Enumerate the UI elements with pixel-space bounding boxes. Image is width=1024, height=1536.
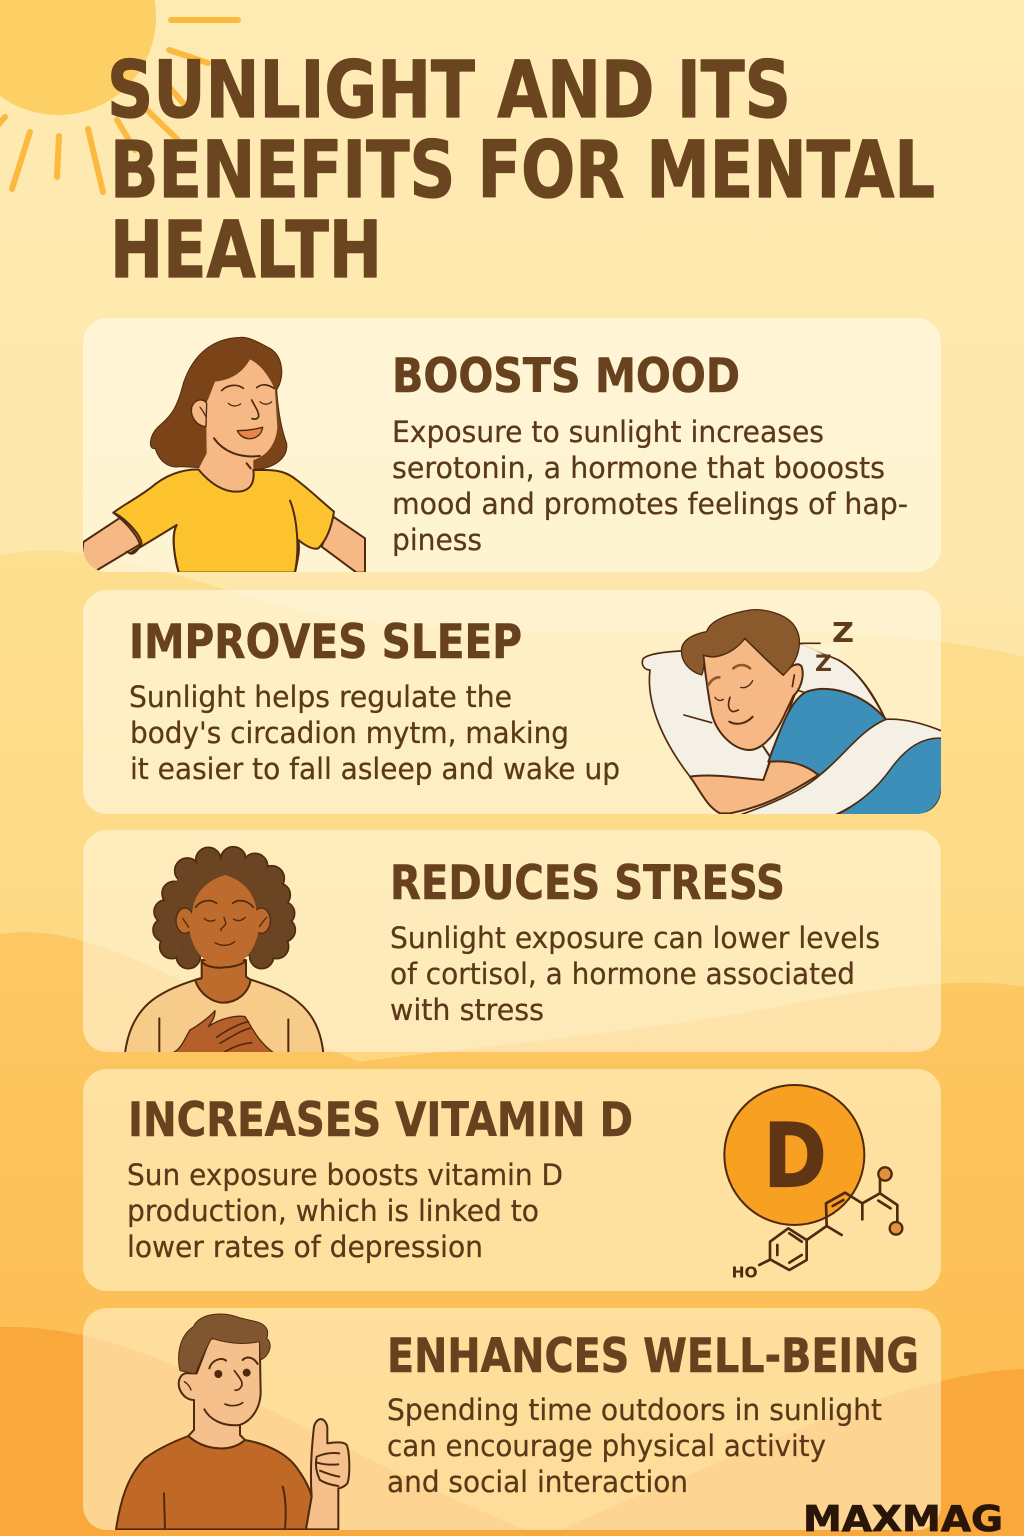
body text: Exposure to sunlight increases bbox=[392, 415, 824, 449]
body text: can encourage physical activity bbox=[387, 1429, 826, 1463]
body text bbox=[392, 415, 908, 557]
body text: it easier to fall asleep and wake up bbox=[130, 752, 620, 786]
title: SUNLIGHT AND ITS bbox=[107, 46, 791, 136]
heading: REDUCES STRESS bbox=[390, 856, 785, 911]
body text: mood and promotes feelings of hap- bbox=[392, 487, 908, 521]
body text: with stress bbox=[390, 993, 544, 1027]
heading: INCREASES VITAMIN D bbox=[128, 1093, 633, 1148]
icon: sleep letters bbox=[815, 616, 854, 677]
body text: production, which is linked to bbox=[127, 1194, 539, 1228]
body text: of cortisol, a hormone associated bbox=[390, 957, 855, 991]
title bbox=[107, 46, 935, 296]
icon: vitamin D molecule bbox=[724, 1085, 902, 1281]
illustration: sleeping man bbox=[642, 610, 943, 815]
icon: vitamin D molecule: D bbox=[763, 1105, 827, 1208]
body text bbox=[127, 1158, 563, 1264]
heading: IMPROVES SLEEP bbox=[129, 615, 522, 670]
body text: piness bbox=[392, 523, 482, 557]
icon: sleep letters: Z bbox=[815, 652, 832, 677]
ears bbox=[176, 908, 270, 933]
title: HEALTH bbox=[110, 206, 382, 296]
panel: reduces stress bbox=[83, 830, 941, 1053]
panel: enhances well-being bbox=[83, 1308, 941, 1530]
heading: ENHANCES WELL-BEING bbox=[387, 1329, 919, 1384]
body text: Spending time outdoors in sunlight bbox=[387, 1393, 882, 1427]
panel: increases vitamin D bbox=[83, 1069, 941, 1291]
body text bbox=[129, 680, 620, 786]
icon: sun bbox=[0, 0, 238, 192]
illustration: curly-haired woman with hand on chest bbox=[125, 847, 323, 1053]
body text: Sunlight exposure can lower levels bbox=[390, 921, 880, 955]
illustration: man with thumbs up bbox=[116, 1314, 349, 1529]
body text: Sun exposure boosts vitamin D bbox=[127, 1158, 563, 1192]
illustration: woman with open arms bbox=[80, 337, 365, 573]
body text: body's circadion mytm, making bbox=[130, 716, 569, 750]
icon: vitamin D molecule: HO bbox=[732, 1263, 758, 1281]
body text: and social interaction bbox=[387, 1465, 688, 1499]
body text bbox=[387, 1393, 882, 1499]
panel: boosts mood bbox=[80, 318, 941, 573]
body text bbox=[390, 921, 880, 1027]
body text: lower rates of depression bbox=[127, 1230, 483, 1264]
body text: Sunlight helps regulate the bbox=[129, 680, 512, 714]
heading: BOOSTS MOOD bbox=[392, 349, 740, 404]
icon: sleep letters: Z bbox=[832, 616, 854, 649]
panel: improves sleep bbox=[83, 590, 943, 815]
body text: serotonin, a hormone that booosts bbox=[392, 451, 885, 485]
